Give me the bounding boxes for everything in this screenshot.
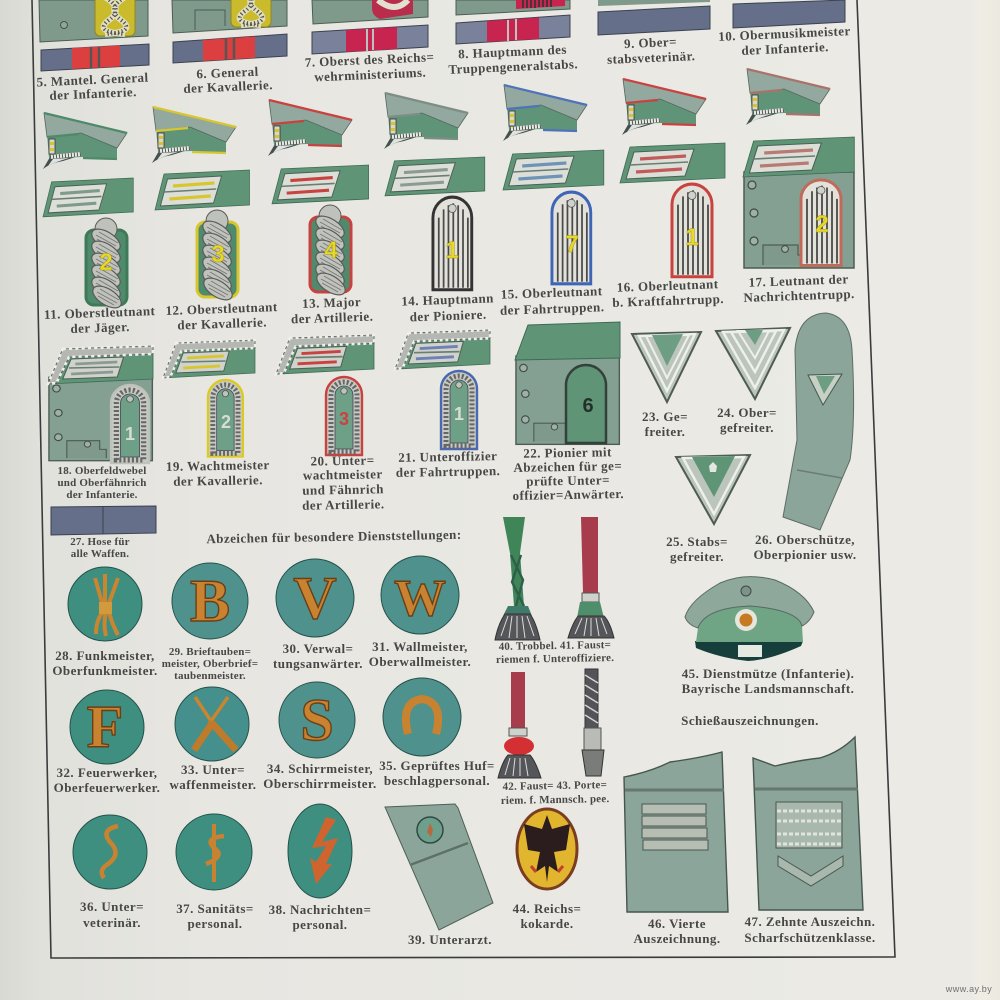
item 5 General Infantry: 5. Mantel. General bbox=[36, 70, 149, 89]
item 45 service cap: Bayrische Landsmannschaft. bbox=[682, 681, 854, 696]
item 23 chevron: freiter. bbox=[645, 424, 685, 439]
item 19: 2 bbox=[221, 412, 231, 432]
item 24 chevron: gefreiter. bbox=[720, 420, 774, 435]
badge 35 horseshoe bbox=[379, 678, 495, 788]
badge 30: tungsanwärter. bbox=[273, 656, 363, 671]
badge 32: F bbox=[87, 694, 123, 760]
item 16: 16. Oberleutnant bbox=[616, 276, 719, 295]
item 8 Hauptmann Generalstab bbox=[447, 0, 578, 77]
item 18: 18. Oberfeldwebel bbox=[58, 465, 146, 477]
item 44 Reichskokarde bbox=[513, 809, 581, 931]
badge 36 snake: 36. Unter= bbox=[80, 899, 144, 914]
item 11: 2 bbox=[99, 249, 113, 276]
item 47 tenth award sleeve bbox=[744, 737, 876, 945]
item 6 General Cavalry bbox=[172, 0, 287, 96]
badge 34: Oberschirrmeister. bbox=[263, 776, 377, 791]
item 17: 2 bbox=[815, 211, 829, 238]
item 26 sleeve: Oberpionier usw. bbox=[753, 547, 857, 562]
item 44 Reichskokarde: 44. Reichs= bbox=[513, 901, 581, 916]
item 20: 3 bbox=[339, 409, 349, 429]
item 46 fourth award sleeve: Auszeichnung. bbox=[633, 931, 721, 946]
item 15 bbox=[499, 85, 605, 318]
item 5 General Infantry bbox=[36, 0, 149, 103]
badge 36 snake: veterinär. bbox=[83, 915, 141, 930]
badge 32: Oberfeuerwerker. bbox=[54, 780, 160, 795]
item 11: der Jäger. bbox=[70, 319, 130, 336]
item 19 bbox=[163, 340, 270, 489]
item 15: der Fahrtruppen. bbox=[500, 299, 605, 318]
badge 28 bbox=[52, 567, 158, 678]
item 9 Oberstabsveterinaer: 9. Ober= bbox=[624, 34, 677, 51]
badge 28: Oberfunkmeister. bbox=[52, 663, 158, 678]
item 46 fourth award sleeve bbox=[624, 752, 728, 946]
item 11: 11. Oberstleutnant bbox=[44, 303, 156, 322]
item 13 bbox=[268, 100, 374, 326]
item 20: der Artillerie. bbox=[302, 496, 385, 513]
item 21: 21. Unteroffizier bbox=[398, 448, 497, 465]
item 7 Oberst Reichswehrministerium bbox=[305, 0, 435, 85]
item 12: 12. Oberstleutnant bbox=[165, 299, 278, 318]
item 8 Hauptmann Generalstab: Truppengeneralstabs. bbox=[448, 56, 578, 77]
item 27 trousers swatch: alle Waffen. bbox=[71, 548, 129, 560]
item 17: 17. Leutnant der bbox=[748, 271, 849, 290]
badge 35 horseshoe: 35. Geprüftes Huf= bbox=[379, 758, 495, 773]
item 22: 6 bbox=[582, 395, 594, 417]
badge 30: V bbox=[293, 565, 337, 631]
item 22: prüfte Unter= bbox=[526, 472, 610, 489]
top row: collar patches 5 to 10 bbox=[36, 0, 852, 103]
badge 29: meister, Oberbrief= bbox=[162, 658, 258, 670]
item 18: der Infanterie. bbox=[66, 489, 138, 501]
item 16: b. Kraftfahrtrupp. bbox=[612, 291, 724, 310]
badge 37 staff: 37. Sanitäts= bbox=[176, 901, 254, 916]
item 25 chevron: gefreiter. bbox=[670, 549, 724, 564]
item 18: 1 bbox=[125, 424, 135, 444]
item 26 sleeve: 26. Oberschütze, bbox=[755, 532, 855, 547]
item 8 Hauptmann Generalstab: 8. Hauptmann des bbox=[458, 42, 567, 61]
item 15: 7 bbox=[565, 231, 579, 258]
item 22: offizier=Anwärter. bbox=[512, 486, 624, 503]
badge 28: 28. Funkmeister, bbox=[55, 648, 155, 663]
heading: marksmanship awards: Schießauszeichnungen. bbox=[681, 713, 819, 728]
item 5 General Infantry: der Infanterie. bbox=[49, 84, 137, 103]
item 14: 14. Hauptmann bbox=[401, 290, 494, 309]
tassel 40 bbox=[495, 517, 540, 640]
item 22 bbox=[512, 322, 624, 503]
row of officers: items 11 to 17 bbox=[43, 69, 855, 337]
item 12 bbox=[152, 107, 279, 333]
item 47 tenth award sleeve: 47. Zehnte Auszeichn. bbox=[745, 914, 875, 929]
item 17 bbox=[743, 69, 855, 305]
badge 38 lightning: 38. Nachrichten= bbox=[269, 902, 371, 917]
item 7 Oberst Reichswehrministerium: wehrministeriums. bbox=[314, 65, 426, 84]
item 13: der Artillerie. bbox=[291, 309, 374, 326]
item 47 tenth award sleeve: Scharfschützenklasse. bbox=[744, 930, 876, 945]
item 22: 22. Pionier mit bbox=[523, 444, 612, 461]
item 24 chevron: 24. Ober= bbox=[717, 405, 777, 420]
item 14: der Pioniere. bbox=[409, 307, 487, 324]
tassel 43 bbox=[582, 669, 604, 776]
item 13: 4 bbox=[324, 237, 338, 264]
badge 31 bbox=[369, 556, 471, 669]
badge 34: 34. Schirrmeister, bbox=[267, 761, 373, 776]
item 18 bbox=[48, 346, 153, 501]
circular badges: items 28 to 38 bbox=[52, 556, 495, 932]
badge 30 bbox=[273, 559, 363, 671]
badge 34: S bbox=[300, 687, 334, 753]
badge 31: 31. Wallmeister, bbox=[372, 639, 468, 654]
item 20: 20. Unter= bbox=[310, 452, 375, 469]
item 26 sleeve bbox=[753, 313, 857, 562]
badge 29: B bbox=[190, 568, 230, 634]
item 23 chevron bbox=[632, 332, 701, 439]
item 20 bbox=[276, 335, 385, 513]
item 27 trousers swatch: 27. Hose für bbox=[70, 536, 130, 548]
item 16: 1 bbox=[685, 224, 699, 251]
item 15: 15. Oberleutnant bbox=[500, 283, 603, 302]
badge 33 crossed rifles: 33. Unter= bbox=[181, 762, 245, 777]
item 9 Oberstabsveterinaer bbox=[598, 0, 710, 67]
watermark: www.ay.by bbox=[945, 984, 992, 994]
tassel 41 bbox=[568, 517, 614, 638]
item 21: der Fahrtruppen. bbox=[396, 463, 500, 480]
badge 38 lightning bbox=[269, 804, 371, 932]
item 39 Unterarzt collar tab bbox=[385, 804, 493, 947]
tassels: items 40 to 43 bbox=[495, 517, 614, 807]
item 10 Obermusikmeister: der Infanterie. bbox=[741, 39, 829, 58]
item 25 chevron bbox=[666, 455, 750, 564]
badge 30: 30. Verwal= bbox=[283, 641, 353, 656]
badge 29: taubenmeister. bbox=[174, 670, 246, 682]
badge 37 staff bbox=[176, 814, 254, 931]
item 20: und Fähnrich bbox=[302, 481, 384, 498]
badge 33 crossed rifles bbox=[169, 687, 257, 792]
item 23 chevron: 23. Ge= bbox=[642, 409, 688, 424]
item 22: Abzeichen für ge= bbox=[513, 458, 622, 475]
item 13: 13. Major bbox=[302, 294, 361, 311]
badge 38 lightning: personal. bbox=[293, 917, 347, 932]
item 9 Oberstabsveterinaer: stabsveterinär. bbox=[607, 48, 696, 67]
caption tassels 40 41: 40. Trobbel. 41. Faust= bbox=[499, 639, 611, 653]
item 39 Unterarzt collar tab: 39. Unterarzt. bbox=[408, 932, 492, 947]
caption tassels 40 41: riemen f. Unteroffiziere. bbox=[496, 652, 614, 666]
item 18: und Oberfähnrich bbox=[57, 477, 147, 489]
item 19: der Kavallerie. bbox=[173, 472, 263, 489]
item 12: der Kavallerie. bbox=[177, 314, 267, 333]
item 19: 19. Wachtmeister bbox=[166, 457, 270, 474]
badge 33 crossed rifles: waffenmeister. bbox=[169, 777, 257, 792]
badge 31: W bbox=[394, 570, 446, 627]
item 27 trousers swatch bbox=[51, 506, 156, 560]
item 45 service cap bbox=[682, 577, 854, 696]
item 17: Nachrichtentrupp. bbox=[743, 286, 855, 305]
badge 34 bbox=[263, 682, 377, 791]
item 14 bbox=[384, 93, 495, 325]
badge 31: Oberwallmeister. bbox=[369, 654, 471, 669]
badge 36 snake bbox=[73, 815, 147, 930]
item 20: wachtmeister bbox=[303, 466, 383, 483]
badge 32: 32. Feuerwerker, bbox=[57, 765, 157, 780]
item 45 service cap: 45. Dienstmütze (Infanterie). bbox=[682, 666, 854, 681]
item 10 Obermusikmeister bbox=[718, 0, 852, 59]
caption tassels 42 43: 42. Faust= 43. Porte= bbox=[503, 779, 607, 793]
badge 37 staff: personal. bbox=[188, 916, 242, 931]
chevrons and sleeve: items 23 to 26 bbox=[632, 313, 857, 564]
badge 32 bbox=[54, 690, 160, 795]
heading: special service badges: Abzeichen für besondere Dienststellungen: bbox=[206, 527, 462, 546]
item 6 General Cavalry: der Kavallerie. bbox=[183, 77, 273, 96]
badge 29: 29. Brieftauben= bbox=[169, 646, 251, 658]
item 11 bbox=[43, 113, 156, 337]
item 24 chevron bbox=[716, 328, 790, 435]
item 25 chevron: 25. Stabs= bbox=[666, 534, 728, 549]
item 21 bbox=[395, 330, 500, 480]
badge 29 bbox=[162, 563, 258, 682]
item 7 Oberst Reichswehrministerium: 7. Oberst des Reichs= bbox=[305, 49, 435, 70]
item 10 Obermusikmeister: 10. Obermusikmeister bbox=[718, 23, 851, 44]
item 14: 1 bbox=[445, 237, 459, 264]
item 16 bbox=[611, 79, 725, 310]
badge 35 horseshoe: beschlagpersonal. bbox=[384, 773, 490, 788]
item 46 fourth award sleeve: 46. Vierte bbox=[648, 916, 706, 931]
item 44 Reichskokarde: kokarde. bbox=[520, 916, 574, 931]
item 6 General Cavalry: 6. General bbox=[196, 64, 259, 81]
item 12: 3 bbox=[211, 241, 225, 268]
row of NCOs: items 18 to 22 bbox=[48, 322, 624, 513]
tassel 42 bbox=[498, 672, 541, 778]
item 21: 1 bbox=[454, 404, 464, 424]
caption tassels 42 43: riem. f. Mannsch. pee. bbox=[501, 793, 610, 807]
